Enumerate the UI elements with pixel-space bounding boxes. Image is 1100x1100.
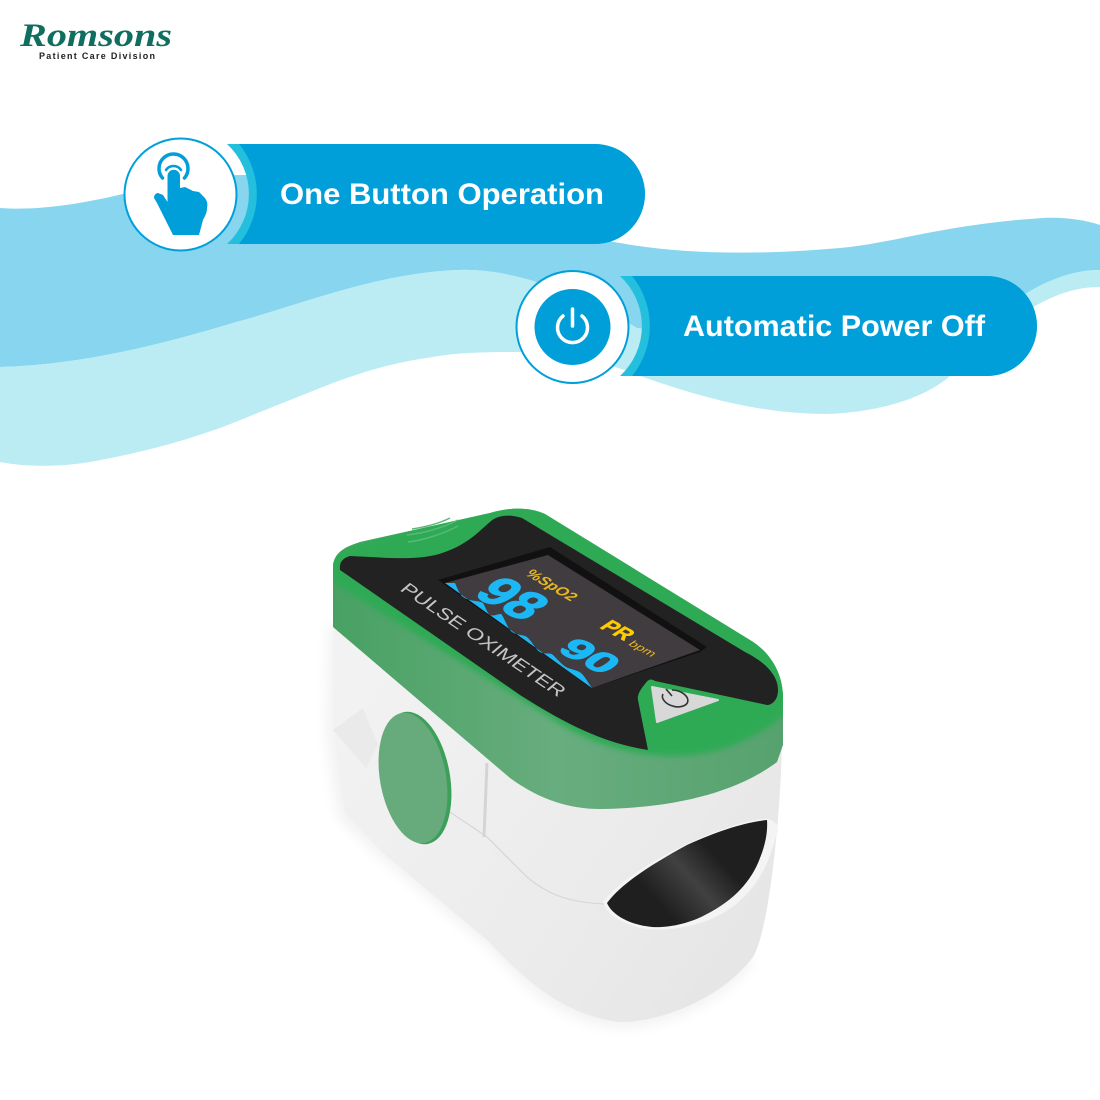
green casing bbox=[333, 509, 783, 809]
callout: automatic power off bbox=[516, 271, 1037, 383]
icon: power symbol bbox=[534, 289, 610, 365]
label text: One Button Operation bbox=[280, 178, 604, 211]
body seam bbox=[450, 812, 607, 904]
logo: Romsons: Patient Care Division bbox=[39, 51, 155, 61]
side button bbox=[369, 706, 461, 850]
background waves bbox=[0, 175, 1100, 466]
power button bbox=[652, 687, 718, 722]
screen readings: bpm bbox=[625, 639, 660, 659]
icon: pointing hand bbox=[154, 154, 207, 235]
finger opening bbox=[603, 819, 778, 929]
label text: Automatic Power Off bbox=[683, 310, 986, 343]
finger flap bbox=[333, 708, 378, 768]
device shadow bbox=[326, 620, 753, 1028]
pulse oximeter device bbox=[325, 501, 795, 1028]
pill foreground bbox=[239, 144, 645, 244]
pill background bbox=[227, 144, 645, 244]
black face bbox=[340, 516, 778, 750]
screen waveform bbox=[445, 583, 592, 688]
icon circle bbox=[124, 138, 236, 250]
screen readings bbox=[462, 567, 660, 680]
screen readings: PR bbox=[595, 617, 641, 644]
callout: one button operation bbox=[124, 138, 645, 250]
logo: Romsons bbox=[19, 18, 172, 61]
hinge slit bbox=[484, 763, 487, 837]
icon circle bbox=[516, 271, 628, 383]
white body bbox=[333, 622, 782, 1022]
device label: PULSE OXIMETER bbox=[396, 579, 571, 700]
screen frame bbox=[438, 547, 707, 688]
screen readings: 90 bbox=[550, 632, 631, 680]
screen readings: 98 bbox=[462, 569, 563, 628]
bright top rim bbox=[325, 501, 795, 756]
pill foreground bbox=[632, 276, 1037, 376]
pill background bbox=[620, 276, 1037, 376]
logo: Romsons: Romsons bbox=[19, 18, 172, 54]
lit screen bbox=[445, 555, 700, 688]
screen readings: %SpO2 bbox=[521, 567, 582, 604]
finger grip ridges bbox=[407, 518, 458, 542]
